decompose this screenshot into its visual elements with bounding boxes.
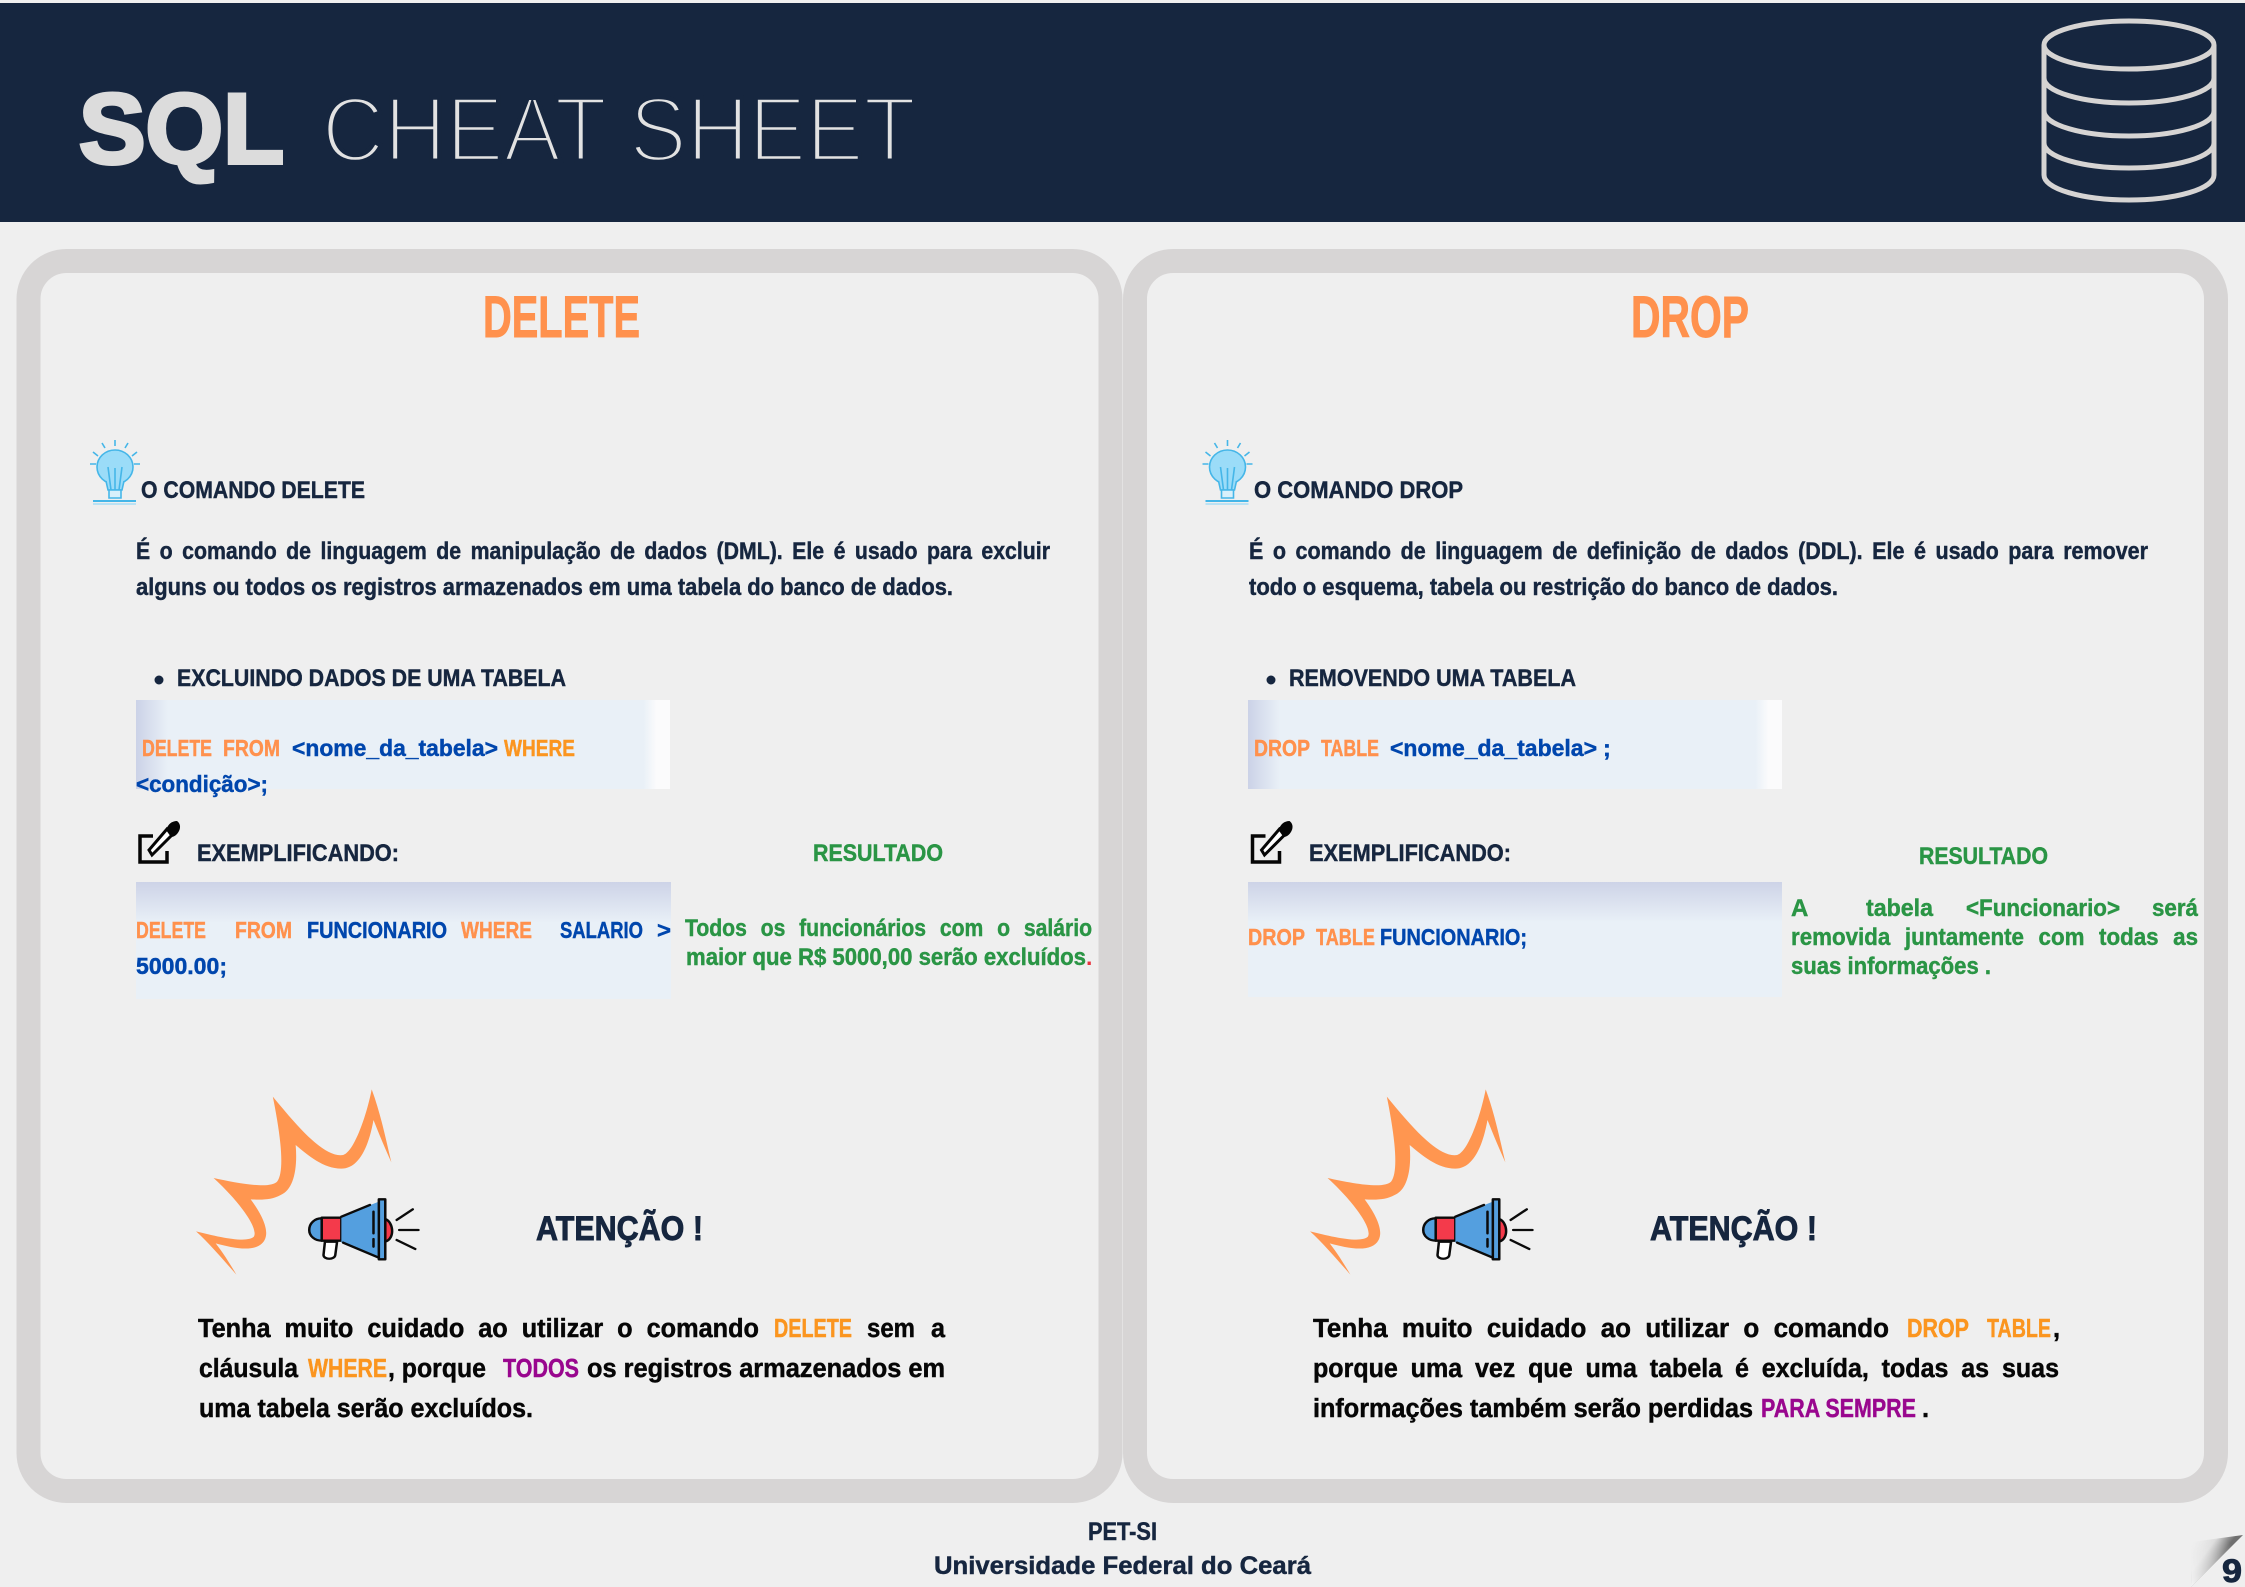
- code box: example: [1248, 882, 1782, 997]
- text block: definition: É o comando de linguagem de manipulação de dados (DML). Ele é usado para excluir: [136, 537, 1050, 565]
- bullet heading: EXCLUINDO DADOS DE UMA TABELA: [177, 665, 566, 692]
- text block: result: [685, 915, 1092, 971]
- heading: DROP: DROP: [1631, 285, 1749, 350]
- label: exemplificando: EXEMPLIFICANDO:: [197, 840, 399, 867]
- text block: warning: .: [1922, 1395, 1929, 1423]
- text block: result: removida juntamente com todas as: [1791, 924, 2198, 951]
- icon: light bulb: [1202, 440, 1252, 504]
- icon: database: [2044, 21, 2214, 200]
- text block: result: maior que R$ 5000,00 serão excluídos: [686, 944, 1086, 971]
- code box: example: FROM: [235, 917, 292, 943]
- panel: DELETE: [28, 261, 1110, 1491]
- footer: PET-SI: [1088, 1518, 1157, 1546]
- text block: definition: alguns ou todos os registros armazenados em uma tabela do banco de dados.: [136, 574, 953, 601]
- code box: syntax: <nome_da_tabela>: [292, 735, 498, 761]
- footer: [934, 1518, 1311, 1580]
- code box: example: >: [657, 917, 671, 943]
- code box: syntax: [1248, 700, 1782, 789]
- header band: [0, 3, 2245, 222]
- code box: syntax: <condição>;: [136, 771, 268, 797]
- code box: syntax: [136, 700, 670, 797]
- text block: result: suas informações .: [1791, 953, 1991, 980]
- code box: syntax: TABLE: [1321, 735, 1379, 761]
- title: SQL: [79, 73, 284, 184]
- code box: syntax: FROM: [223, 735, 280, 761]
- code box: syntax: DELETE: [142, 735, 212, 761]
- code box: syntax: ;: [1603, 735, 1611, 761]
- code box: syntax: DROP: [1254, 735, 1310, 761]
- text block: definition: todo o esquema, tabela ou restrição do banco de dados.: [1249, 574, 1838, 601]
- text block: definition: É o comando de linguagem de definição de dados (DDL). Ele é usado para remover: [1249, 537, 2148, 565]
- text block: warning: Tenha muito cuidado ao utilizar o comando: [198, 1315, 759, 1343]
- label: exemplificando: EXEMPLIFICANDO:: [1309, 840, 1511, 867]
- text block: warning: a: [931, 1315, 946, 1343]
- icon: light bulb: [90, 440, 140, 504]
- bullet heading: REMOVENDO UMA TABELA: [1289, 665, 1576, 692]
- code box: example: 5000.00;: [136, 953, 227, 979]
- text block: warning: , porque: [388, 1355, 486, 1383]
- code box: example: [136, 882, 671, 999]
- text block: result: tabela: [1866, 895, 1934, 922]
- title: CHEAT SHEET: [322, 79, 916, 181]
- text block: warning: uma tabela serão excluídos.: [199, 1395, 533, 1423]
- code box: example: FUNCIONARIO;: [1380, 924, 1527, 950]
- text block: result: .: [1086, 944, 1092, 970]
- text block: result: Todos os funcionários com o salário: [685, 915, 1092, 942]
- panel: DROP: [1135, 261, 2216, 1491]
- icon: megaphone: [1423, 1199, 1532, 1259]
- code box: syntax: <nome_da_tabela>: [1390, 735, 1597, 761]
- code box: example: DELETE: [136, 917, 206, 943]
- title: [79, 73, 916, 184]
- text block: warning: DELETE: [774, 1315, 852, 1343]
- heading: atenção: ATENÇÃO !: [536, 1210, 703, 1248]
- text block: warning: TABLE: [1987, 1315, 2051, 1343]
- icon: megaphone: [309, 1199, 418, 1259]
- heading: DELETE: DELETE: [483, 285, 640, 350]
- icon: orange burst: [1310, 1089, 1505, 1275]
- text block: warning: DROP: [1907, 1315, 1969, 1343]
- text block: warning: porque uma vez que uma tabela é excluída, todas as suas: [1313, 1355, 2059, 1383]
- icon: orange burst: [196, 1089, 391, 1275]
- text block: warning: informações também serão perdidas: [1313, 1395, 1753, 1423]
- code box: example: SALARIO: [560, 917, 643, 943]
- text block: result: A: [1791, 895, 1808, 922]
- code box: example: TABLE: [1316, 924, 1375, 950]
- text block: warning: [198, 1315, 946, 1423]
- text block: warning: sem: [867, 1315, 915, 1343]
- code box: example: DROP: [1248, 924, 1305, 950]
- text block: definition: [1249, 537, 2148, 601]
- code box: example: WHERE: [461, 917, 532, 943]
- text block: warning: TODOS: [503, 1355, 579, 1383]
- icon: edit pen: [1252, 821, 1293, 862]
- text block: result: será: [2152, 895, 2199, 922]
- label: resultado: RESULTADO: [813, 840, 943, 867]
- code box: example: FUNCIONARIO: [307, 917, 447, 943]
- footer: Universidade Federal do Ceará: [934, 1552, 1311, 1580]
- text block: result: <Funcionario>: [1966, 895, 2120, 922]
- heading: atenção: ATENÇÃO !: [1650, 1210, 1817, 1248]
- label: resultado: RESULTADO: [1919, 843, 2048, 870]
- text block: warning: PARA SEMPRE: [1761, 1395, 1916, 1423]
- heading: O COMANDO DELETE: O COMANDO DELETE: [141, 477, 365, 504]
- text block: warning: WHERE: [308, 1355, 387, 1383]
- text block: warning: [1313, 1315, 2060, 1423]
- page curl and number: [2191, 1535, 2243, 1587]
- heading: O COMANDO DROP: O COMANDO DROP: [1254, 477, 1463, 504]
- text block: result: [1791, 895, 2199, 980]
- text block: warning: Tenha muito cuidado ao utilizar o comando: [1313, 1315, 1889, 1343]
- code box: syntax: WHERE: [504, 735, 575, 761]
- text block: definition: [136, 537, 1050, 601]
- text block: warning: cláusula: [199, 1355, 299, 1383]
- text block: warning: os registros armazenados em: [587, 1355, 945, 1383]
- text block: warning: ,: [2053, 1315, 2060, 1343]
- icon: edit pen: [140, 821, 180, 862]
